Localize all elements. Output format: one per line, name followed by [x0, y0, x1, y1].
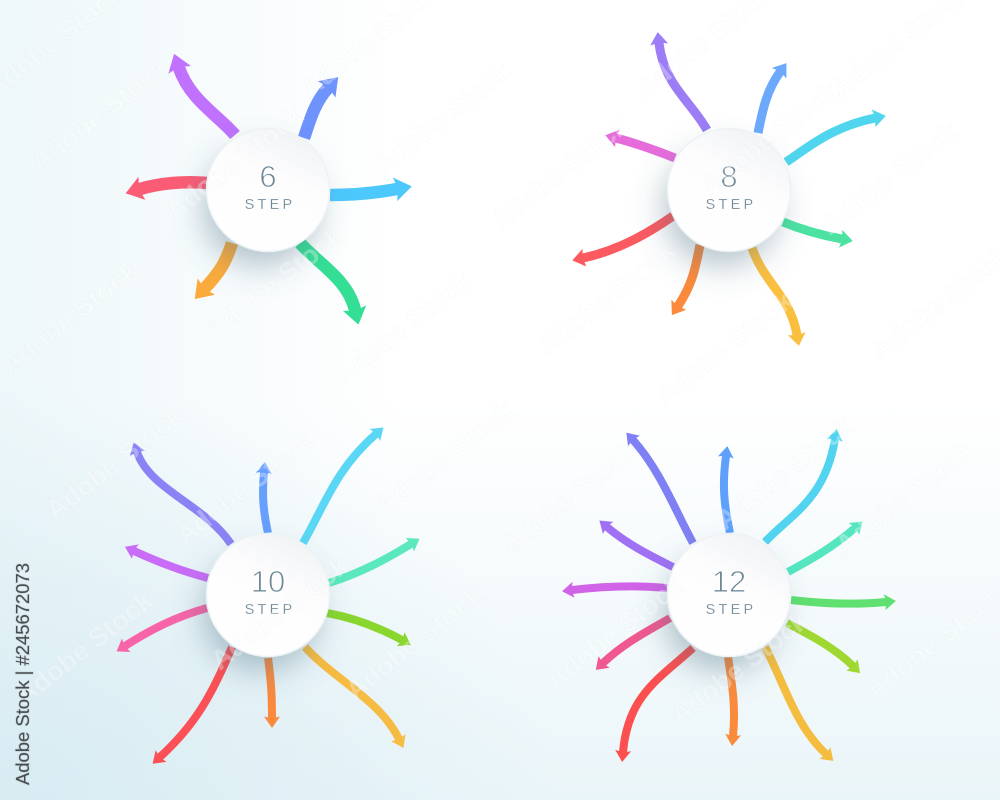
circle shadow	[664, 555, 780, 671]
arrow: orange	[268, 658, 272, 718]
arrow: red	[160, 647, 232, 757]
watermarks: Adobe Stock	[205, 550, 354, 676]
number: 8	[720, 159, 738, 194]
watermarks: Adobe Stock	[160, 100, 309, 226]
arrow: green	[791, 600, 886, 604]
circle	[668, 128, 790, 252]
arrow: red	[623, 648, 693, 752]
watermarks: Adobe Stock	[830, 435, 979, 561]
watermarks: Adobe Stock	[170, 425, 319, 551]
circle shadow	[203, 150, 319, 266]
watermarks: Adobe Stock	[540, 570, 689, 696]
arrow: cyan	[330, 189, 397, 195]
arrow: green	[783, 222, 842, 239]
label: STEP	[245, 197, 295, 213]
watermarks: Adobe Stock	[10, 585, 159, 711]
arrow: teal	[788, 528, 855, 572]
arrow: red	[140, 182, 207, 189]
label: STEP	[706, 197, 756, 213]
arrow: magenta	[572, 586, 667, 590]
arrow: red	[583, 216, 673, 258]
circle	[206, 128, 330, 252]
watermarks: Adobe Stock	[370, 395, 519, 521]
watermarks: Adobe Stock	[532, 235, 681, 361]
arrow: blue	[304, 88, 328, 138]
arrow: blue	[724, 456, 730, 533]
diagram: 10 step	[125, 434, 411, 757]
arrow: yellow	[752, 248, 797, 335]
label: STEP	[706, 602, 756, 618]
watermarks: Adobe Stock	[25, 52, 174, 178]
arrow: cyan	[765, 439, 835, 542]
watermarks: Adobe Stock	[665, 605, 814, 731]
arrow: pink	[603, 618, 670, 663]
circle shadow	[664, 150, 780, 266]
arrow: violet	[607, 527, 673, 567]
arrow: lime	[327, 613, 402, 640]
circle	[668, 534, 790, 656]
arrow: cyan	[786, 118, 875, 162]
arrow: purple	[179, 68, 235, 135]
number: 6	[259, 159, 277, 194]
circle shadow	[203, 555, 319, 671]
diagram: 6 step	[140, 68, 397, 310]
arrow: orange	[728, 657, 734, 736]
diagram: 8 step	[583, 43, 875, 335]
arrow: yellow	[305, 647, 399, 739]
watermarks: Adobe Stock	[650, 285, 799, 411]
arrow: pink	[125, 608, 207, 646]
number: 12	[712, 564, 746, 599]
watermarks: Adobe Stock	[200, 220, 349, 346]
arrow: indigo	[633, 440, 693, 543]
vertical stock id text: Adobe Stock | #245672073	[13, 563, 33, 785]
watermarks: Adobe Stock	[495, 435, 644, 561]
diagram: 12 step	[572, 439, 886, 754]
arrow: magenta	[616, 138, 675, 158]
arrow: teal	[329, 544, 411, 583]
label: STEP	[245, 602, 295, 618]
arrow: green	[300, 243, 355, 310]
arrow: purple	[659, 43, 707, 130]
circle	[206, 534, 330, 656]
watermarks: Adobe Stock	[340, 580, 489, 706]
arrow: blue	[758, 72, 780, 133]
watermarks: Adobe Stock	[485, 110, 634, 236]
watermarks: Adobe Stock	[40, 400, 189, 526]
arrow: blue	[263, 472, 268, 533]
arrow: lime	[787, 623, 853, 666]
number: 10	[251, 564, 285, 599]
watermarks: Adobe Stock	[815, 115, 964, 241]
watermarks: Adobe Stock	[710, 410, 859, 536]
watermarks: Adobe Stock	[328, 265, 477, 391]
arrow: indigo	[137, 452, 231, 544]
arrow: violet	[134, 551, 208, 578]
arrow: orange	[205, 243, 232, 288]
arrow: cyan	[303, 434, 376, 543]
arrow: yellow	[765, 647, 826, 754]
watermarks: Adobe Stock	[695, 75, 844, 201]
watermarks: Adobe Stock	[368, 55, 517, 181]
arrow: orange	[678, 245, 700, 306]
